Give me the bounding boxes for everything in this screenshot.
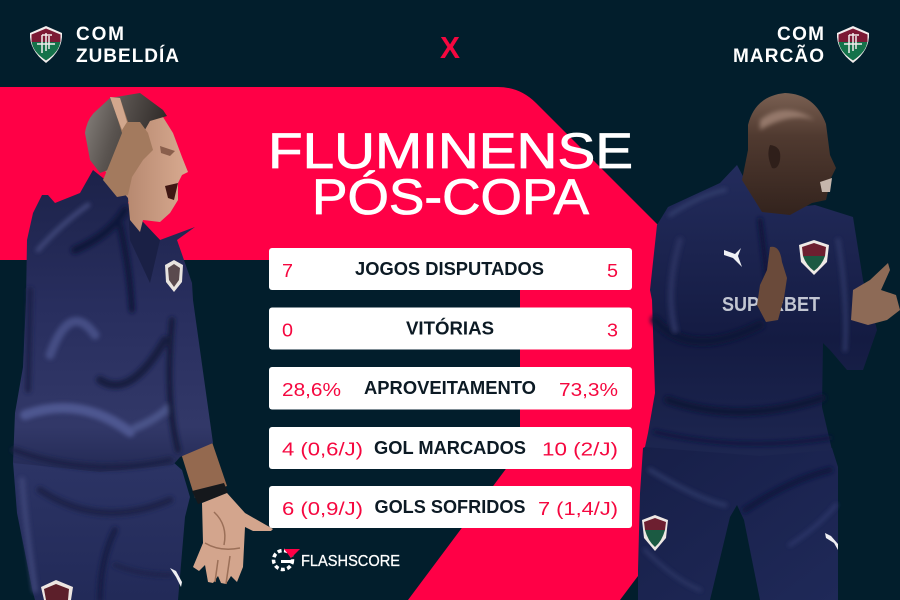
- header left: crest and coach name: [30, 24, 179, 67]
- pants: [638, 447, 838, 600]
- open mouth: [165, 183, 178, 200]
- title: [268, 123, 633, 225]
- crest on shirt: [799, 240, 829, 275]
- ear: [768, 145, 780, 168]
- heading: com Marcão: MARCÃO: [733, 45, 824, 67]
- heading: com Zubeldía: ZUBELDÍA: [76, 45, 179, 67]
- neck and head: [742, 93, 836, 215]
- icon: Fluminense crest left: [30, 26, 62, 63]
- Flashscore logo: [274, 549, 400, 570]
- stat row: jogos disputados: JOGOS DISPUTADOS: [355, 259, 544, 279]
- heading: com Zubeldía: [76, 24, 179, 67]
- eye shadow: [160, 146, 175, 156]
- stat row: vitórias: 3: [607, 320, 618, 340]
- inner shirt collar: [128, 205, 160, 283]
- photo: coach Zubeldía: [13, 93, 273, 600]
- stat row: vitórias: 0: [282, 320, 293, 340]
- puma logo on pants: [170, 568, 182, 587]
- wordmark: FLASHSCORE: [301, 553, 400, 570]
- stat row: gol marcados: [269, 427, 632, 469]
- forearm: [180, 442, 227, 498]
- stat row: gols sofridos: 6 (0,9/J): [282, 499, 363, 519]
- heading: com Marcão: COM: [777, 24, 824, 45]
- stat row: gols sofridos: 7 (1,4/J): [538, 499, 618, 519]
- stat row: aproveitamento: APROVEITAMENTO: [364, 378, 536, 398]
- stat row: gol marcados: 10 (2/J): [542, 440, 618, 460]
- shirt with sleeves: [645, 165, 877, 456]
- hair: [85, 93, 167, 173]
- raised hand with thumb: [103, 97, 153, 197]
- clapping left hand: [757, 247, 787, 322]
- open hand: [193, 493, 273, 584]
- pants: [13, 462, 190, 600]
- stat row: jogos disputados: 7: [282, 261, 293, 281]
- stat row: vitórias: [269, 308, 632, 350]
- jacket folds and highlights: [14, 205, 178, 467]
- versus mark: X: [440, 30, 460, 65]
- stat row: vitórias: VITÓRIAS: [406, 318, 494, 338]
- crest on pants: [41, 580, 73, 600]
- photo: coach Marcão: [638, 93, 900, 600]
- stat row: gols sofridos: GOLS SOFRIDOS: [374, 497, 526, 517]
- sponsor text on shirt: SUPERBET: [722, 294, 820, 316]
- red diagonal background shape: [0, 87, 680, 600]
- stat row: aproveitamento: 73,3%: [559, 380, 618, 400]
- crest on jacket: [165, 260, 183, 292]
- icon: dashed ring with red wing: [274, 549, 300, 570]
- stat row: aproveitamento: 28,6%: [282, 380, 341, 400]
- wrist watch: [192, 483, 228, 504]
- stat row: aproveitamento: [269, 367, 632, 410]
- stat row: jogos disputados: [269, 248, 632, 290]
- title: FLUMINENSE: [268, 123, 633, 179]
- title: PÓS-COPA: [312, 169, 590, 225]
- pants folds: [22, 480, 170, 600]
- clapping right hand: [851, 263, 900, 325]
- thumb highlight: [110, 97, 127, 130]
- hand creases: [205, 512, 240, 584]
- head highlight: [760, 110, 815, 130]
- puma logo on shirt: [724, 248, 742, 267]
- heading: com Marcão: [733, 24, 824, 67]
- puma logo on pants: [825, 533, 838, 550]
- neck and face: [100, 117, 188, 232]
- stat row: jogos disputados: 5: [607, 261, 618, 281]
- stat row: gols sofridos: [269, 486, 632, 528]
- stat row: gol marcados: 4 (0,6/J): [282, 440, 363, 460]
- mouth: [820, 178, 832, 192]
- jacket body and raised sleeve: [13, 170, 213, 472]
- header right: coach name and crest: [733, 24, 869, 67]
- heading: com Zubeldía: COM: [76, 24, 124, 45]
- pants folds: [645, 470, 836, 590]
- icon: Fluminense crest right: [837, 26, 869, 63]
- stat row: gol marcados: GOL MARCADOS: [374, 438, 526, 458]
- shirt folds: [655, 190, 846, 444]
- crest on pants: [642, 515, 668, 551]
